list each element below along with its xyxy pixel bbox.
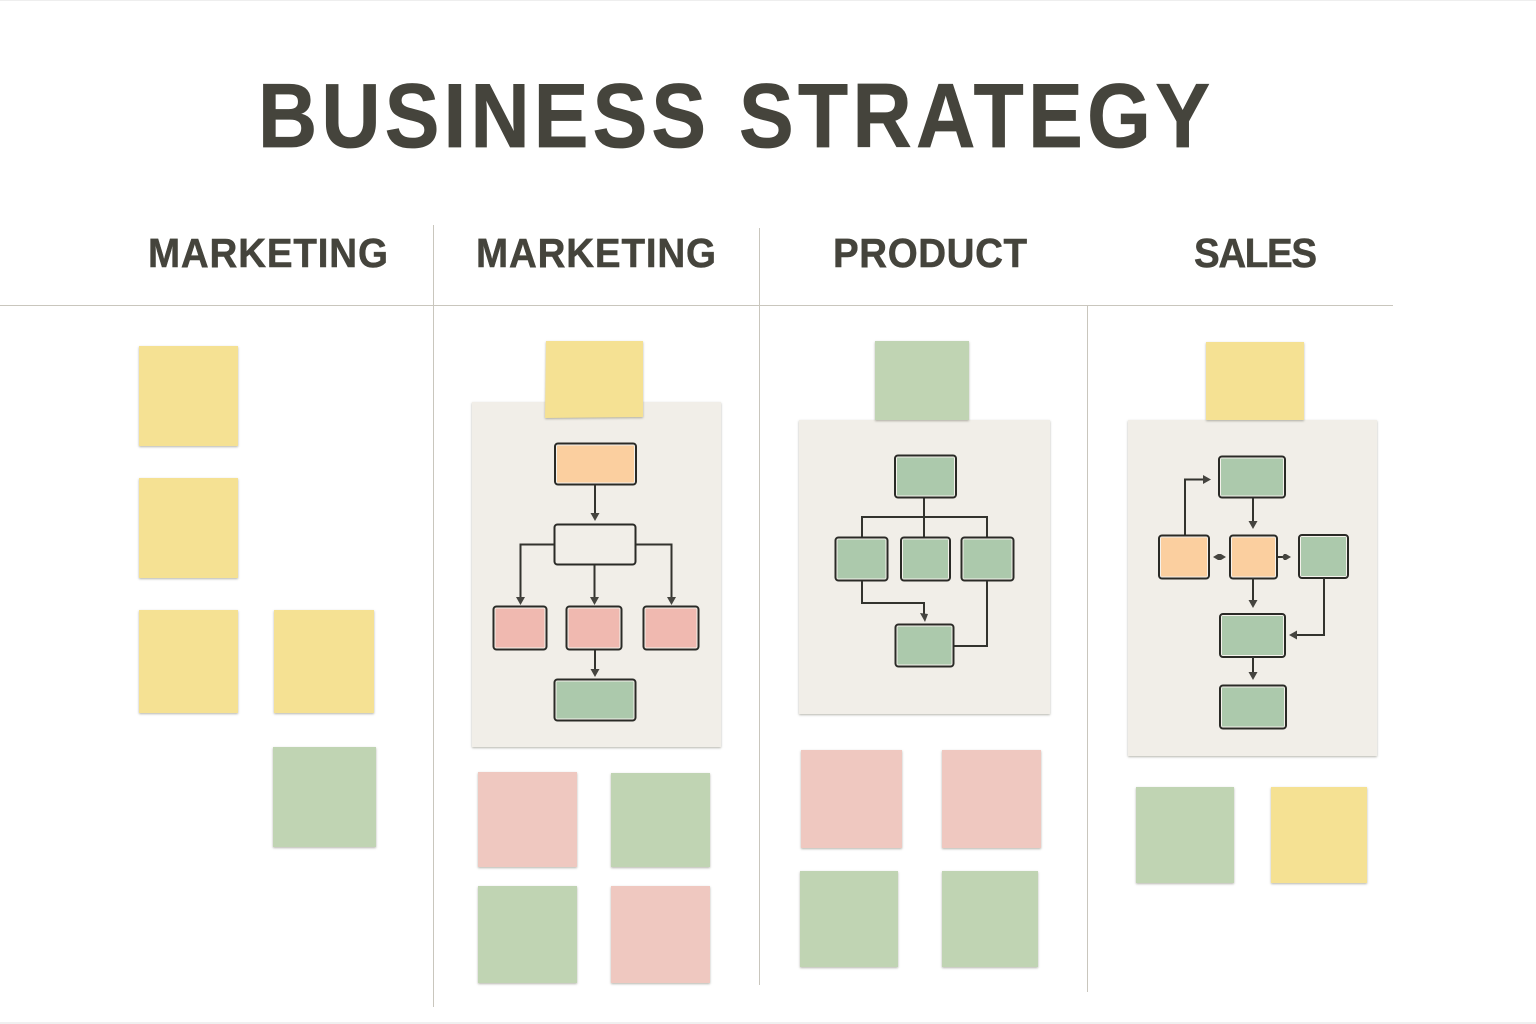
box: green middle <box>901 538 950 580</box>
sticky: yellow 3 <box>139 610 238 713</box>
column 4 sticky notes <box>1136 787 1367 883</box>
sticky: yellow 2 <box>139 478 238 578</box>
sticky: yellow <box>1271 787 1367 883</box>
connector: top to three boxes <box>862 498 987 537</box>
column 2 flowchart board <box>472 341 721 747</box>
box: green left <box>836 538 888 580</box>
box: green top <box>895 456 956 498</box>
box: green right <box>1299 535 1348 578</box>
sticky: green <box>478 886 577 983</box>
box: pink right <box>644 606 698 650</box>
box: orange left <box>1159 536 1209 578</box>
arrow: centre to right <box>1278 554 1291 560</box>
box: orange start <box>555 444 636 484</box>
paper sheet <box>472 402 721 747</box>
sticky: green <box>611 773 710 867</box>
box: green right <box>962 538 1014 580</box>
sticky: yellow 4 <box>274 610 374 713</box>
box: green middle <box>1220 614 1285 657</box>
column heading: product: PRODUCT <box>833 231 1027 276</box>
arrow: start to decision <box>590 485 600 521</box>
title: BUSINESS <box>258 66 706 167</box>
sticky: pink <box>478 772 577 867</box>
arrow: orange to top <box>1185 475 1211 535</box>
arrow: right to middle <box>1289 578 1324 640</box>
sticky: green <box>273 747 376 847</box>
column 2 sticky notes <box>478 772 710 983</box>
sticky: green <box>942 871 1038 967</box>
column heading: marketing 1: MARKETING <box>148 231 388 276</box>
box: white decision <box>554 524 636 564</box>
sticky: yellow on sheet <box>545 341 643 418</box>
arrow: decision to middle <box>590 565 599 605</box>
box: orange centre <box>1230 536 1277 578</box>
paper sheet <box>1128 420 1377 756</box>
arrow: centre to middle <box>1248 578 1258 608</box>
arrow: decision to left <box>516 544 554 605</box>
box: pink middle <box>566 606 622 650</box>
title: STRATEGY <box>739 66 1210 167</box>
column 3 flowchart board <box>799 341 1050 714</box>
arrow: top to centre <box>1248 498 1258 529</box>
arrow: decision to right <box>636 544 676 605</box>
column heading: sales: SALES <box>1194 231 1317 276</box>
sticky: pink <box>942 750 1041 848</box>
box: green bottom <box>1220 686 1286 728</box>
sticky: pink <box>611 886 710 983</box>
arrow: left to bottom <box>862 581 928 622</box>
box: green end <box>554 680 636 720</box>
column 3 sticky notes <box>800 750 1041 967</box>
arrow: middle to green <box>590 650 600 677</box>
sticky: green <box>1136 787 1234 883</box>
arrow: left to centre <box>1213 554 1226 560</box>
column 4 flowchart board <box>1128 342 1377 756</box>
box: green top <box>1219 456 1285 498</box>
sticky: pink <box>801 750 902 848</box>
column 1 sticky notes <box>139 346 376 847</box>
column heading: marketing 2: MARKETING <box>476 231 716 276</box>
box: pink left <box>494 606 546 650</box>
arrow: middle to bottom <box>1248 657 1258 680</box>
connector: right to bottom <box>954 581 987 646</box>
sticky: yellow on sheet <box>1206 342 1304 420</box>
sticky: yellow 1 <box>139 346 238 446</box>
paper sheet <box>799 420 1050 714</box>
sticky: green on sheet <box>875 341 969 420</box>
box: green bottom <box>896 624 954 666</box>
sticky: green <box>800 871 898 967</box>
